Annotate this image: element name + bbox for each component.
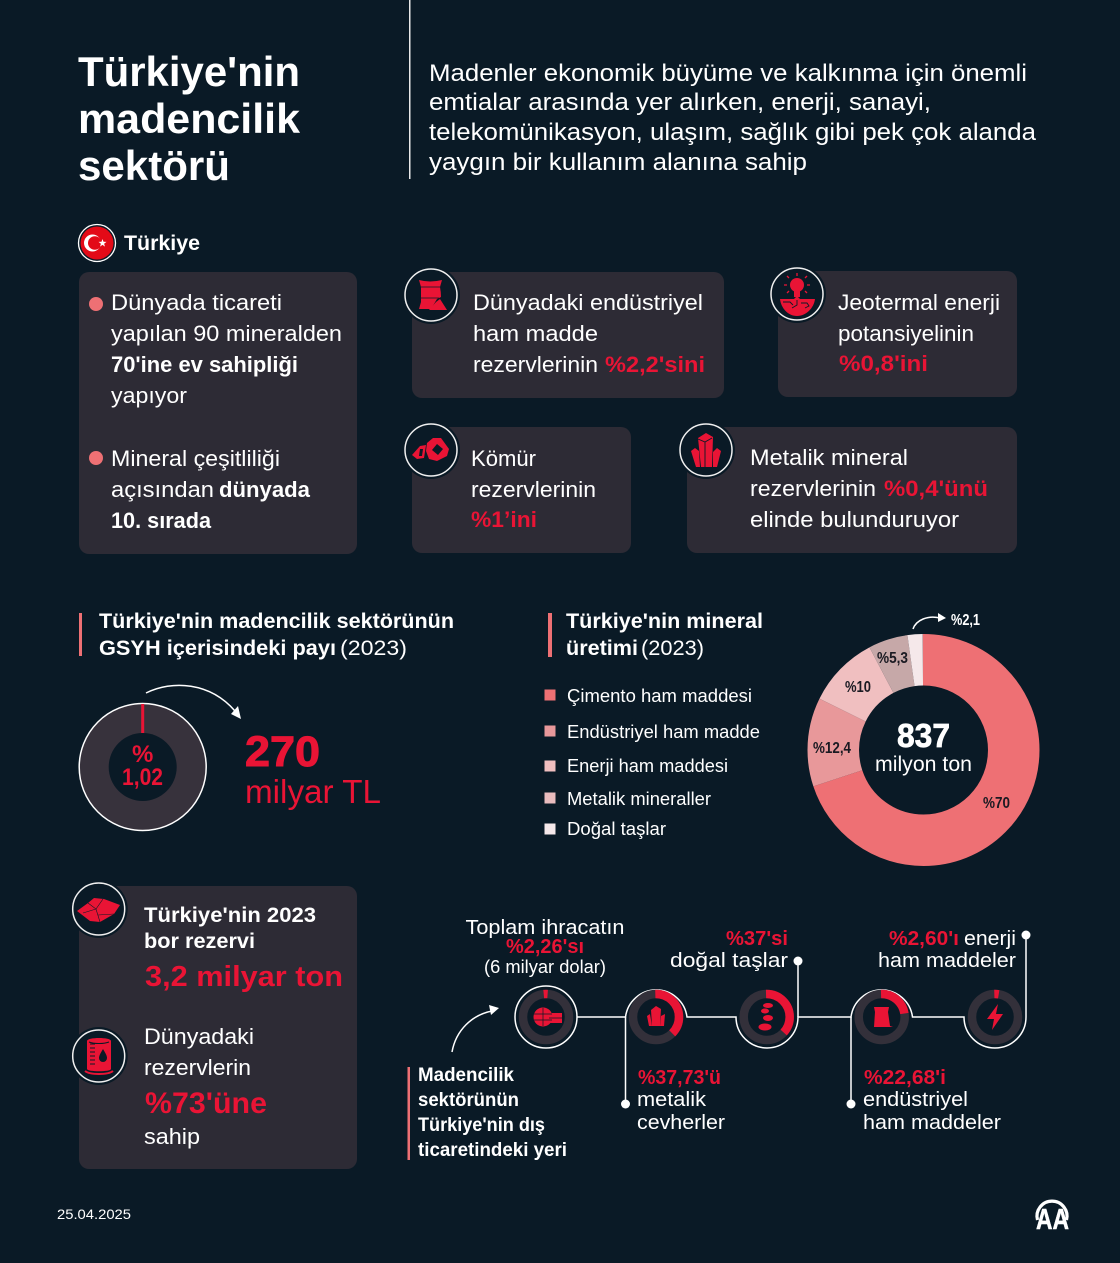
icon: boron mineral [70,880,128,938]
text: foreign trade heading: ticaretindeki yeri [418,1140,567,1161]
text: %1’ini [471,507,537,532]
bullet: trade [89,297,103,311]
node: energy raw materials [972,994,1018,1040]
heading: GDP share: GSYH içerisindeki payı [99,637,336,660]
text: trade: yapıyor [111,383,187,408]
node: industrial raw materials [859,994,905,1040]
chart: mineral production donut: 837 [897,717,950,754]
intro text [429,60,1037,176]
icon: geothermal bulb [768,265,826,323]
text: diversity: açısından [111,477,214,502]
callout: %2,1: %2,1 [951,612,980,629]
text: world reserve share [144,1024,267,1149]
chart: mineral production donut: %5,3 [877,650,908,667]
title: Türkiye'nin [78,48,300,95]
text: world reserve share: %73'üne [145,1087,267,1120]
icon: crystals [677,421,735,479]
label: energy raw materials: ham maddeler [878,950,1016,972]
chart: mineral production donut: %12,4 [813,740,851,757]
heading: Türkiye: Türkiye [124,232,200,255]
text: boron reserve: bor rezervi [144,930,255,953]
label: metal ores: cevherler [637,1112,725,1134]
label: industrial raw materials [863,1067,1001,1134]
panel: boron reserves [70,880,357,1169]
text: world reserve share: Dünyadaki [144,1024,254,1049]
logo: AA: AA [1036,1204,1069,1236]
label: natural stones: doğal taşlar [670,950,788,972]
bullet: diversity [89,451,103,465]
arrow: to value [146,685,241,719]
legend: Endüstriyel ham madde [567,722,760,742]
legend: Metalik mineraller [567,789,711,809]
text: diversity [111,446,311,533]
intro text: yaygın bir kullanım alanına sahip [429,149,807,176]
label: metal ores [637,1067,725,1134]
title [78,48,301,189]
intro text: emtialar arasında yer alırken, enerji, sanayi, [429,89,931,116]
text: Kömür [471,446,536,471]
chart: mineral production donut: %10 [845,679,871,696]
text: trade: yapılan 90 mineralden [111,321,342,346]
text: boron reserve [144,904,343,993]
text: %0,4'ünü [884,476,988,501]
arrow: to timeline [452,1005,499,1052]
heading: mineral production: (2023) [641,637,704,660]
label: industrial raw materials: ham maddeler [863,1112,1001,1134]
title: sektörü [78,142,230,189]
text: %0,8'ini [839,351,928,376]
chart: mineral production donut [813,650,1014,840]
panel: geothermal [768,265,1017,397]
text: Jeotermal enerji [838,290,1000,315]
text: Dünyadaki endüstriyel [473,290,703,315]
text [838,290,1000,376]
chart: mineral production donut: %70 [983,795,1010,812]
text: diversity: dünyada [219,477,311,502]
text: rezervlerinin [471,477,596,502]
label: energy raw materials: enerji [964,928,1016,950]
label: total exports: Toplam ihracatın [466,917,624,939]
text: foreign trade heading [408,1065,567,1161]
text: ham madde [473,321,598,346]
chart: GDP share donut: % [132,741,153,768]
text: Metalik mineral [750,445,908,470]
text [471,446,596,532]
label: energy raw materials [878,928,1016,972]
callout: %2,1 [913,612,980,629]
node: natural stones [744,994,790,1040]
chart: GDP share donut [79,704,206,830]
value: 270 milyar TL: 270 [245,728,320,776]
heading: mineral production: üretimi [566,637,638,660]
text: world reserve share: sahip [144,1124,200,1149]
text: trade: 70'ine ev sahipliği [111,352,298,377]
legend [544,686,760,839]
text: foreign trade heading: Türkiye'nin dış [418,1115,545,1136]
label: metal ores: metalik [637,1089,707,1111]
legend: Enerji ham maddesi [567,756,728,776]
timeline connector [515,930,1030,1108]
text: diversity: Mineral çeşitliliği [111,446,280,471]
label: total exports [466,917,624,977]
heading: mineral production [548,610,763,660]
legend: Doğal taşlar [567,819,666,839]
text [473,290,705,377]
icon: Turkish flag [78,224,116,262]
value: 270 milyar TL [245,728,381,810]
text: rezervlerinin [473,352,598,377]
text: %2,2'sini [605,352,705,377]
panel: coal [402,421,631,553]
text [750,445,988,532]
text: elinde bulunduruyor [750,507,959,532]
text: foreign trade heading: Madencilik [418,1065,514,1086]
text: world reserve share: rezervlerin [144,1055,251,1080]
text: trade [111,290,342,408]
label: industrial raw materials: endüstriyel [863,1089,968,1111]
title: madencilik [78,95,301,142]
intro text: telekomünikasyon, ulaşım, sağlık gibi pek çok alanda [429,119,1037,146]
text: trade: Dünyada ticareti [111,290,282,315]
label: natural stones [670,928,788,972]
text: boron reserve: 3,2 milyar ton [145,961,343,993]
label: metal ores: %37,73'ü [638,1067,721,1089]
icon: coal [402,421,460,479]
icon: reserve tank [70,1027,128,1085]
date: 25.04.2025 [57,1206,131,1222]
text: rezervlerinin [750,476,876,501]
label: energy raw materials: %2,60'ı [889,928,959,950]
label: total exports: %2,26'sı [506,936,584,958]
text: foreign trade heading: sektörünün [418,1090,519,1111]
panel: industrial raw materials [402,266,724,398]
heading: GDP share [79,610,454,660]
intro text: Madenler ekonomik büyüme ve kalkınma için önemli [429,60,1027,87]
heading: GDP share: (2023) [340,637,407,660]
text: potansiyelinin [838,321,974,346]
text: diversity: 10. sırada [111,508,212,533]
chart: GDP share donut: 1,02 [122,764,163,791]
chart: mineral production donut: milyon ton [875,753,972,776]
panel: Türkiye facts [79,272,357,554]
heading: mineral production: Türkiye'nin mineral [566,610,763,633]
legend: Çimento ham maddesi [567,686,752,706]
icon: sack [402,266,460,324]
node: metal ores [633,994,679,1040]
label: total exports: (6 milyar dolar) [484,957,606,977]
label: natural stones: %37'si [726,928,788,950]
panel: metallic minerals [677,421,1017,553]
value: 270 milyar TL: milyar TL [245,773,381,810]
label: industrial raw materials: %22,68'i [864,1067,946,1089]
text: boron reserve: Türkiye'nin 2023 [144,904,316,927]
heading: GDP share: Türkiye'nin madencilik sektörünün [99,610,454,633]
node: total exports [521,992,571,1042]
